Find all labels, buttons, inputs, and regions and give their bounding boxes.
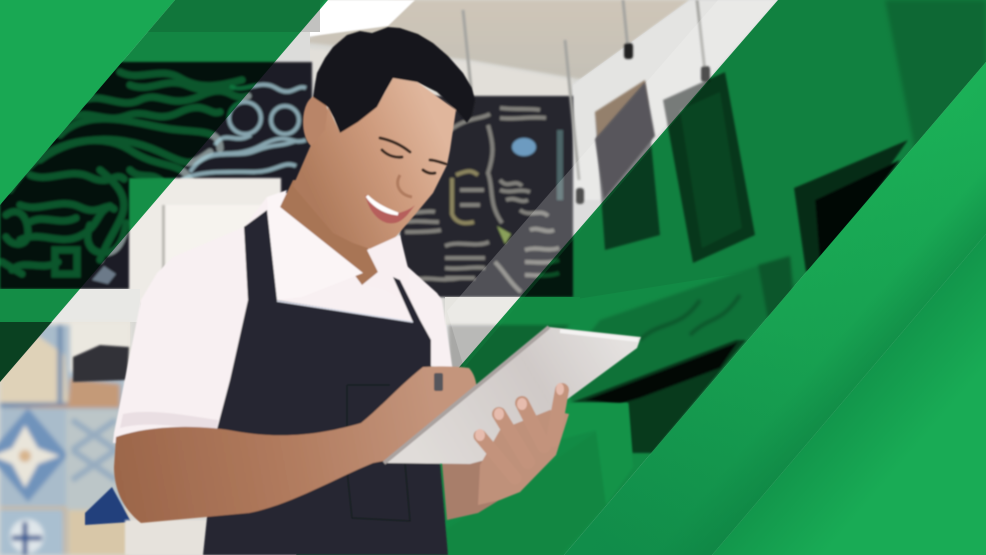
right side wall <box>560 0 986 555</box>
wall art band <box>560 256 795 402</box>
upper wall near ceiling <box>572 0 778 200</box>
collar <box>267 190 363 300</box>
tile wall <box>0 322 130 555</box>
apron bib <box>203 210 448 555</box>
rear forearm <box>442 440 530 520</box>
ear <box>303 96 329 148</box>
nose shadow <box>398 175 412 197</box>
blue box <box>85 487 131 525</box>
ring <box>434 373 443 391</box>
hanging frame one <box>595 80 660 250</box>
waiter figure <box>113 27 641 555</box>
apron collar highlight <box>277 301 413 322</box>
dark plant patch under left band <box>0 322 52 382</box>
shirt body and sleeve <box>113 190 453 443</box>
frame one seen through band <box>595 82 655 199</box>
ceiling beam <box>270 45 572 98</box>
solid green corner: bottom right <box>712 234 986 555</box>
stone counter <box>125 520 210 555</box>
top right darker wall <box>885 0 986 150</box>
grey patterned wall <box>448 325 570 400</box>
dark shelf <box>572 340 746 453</box>
neck <box>280 180 378 285</box>
holding hand <box>475 383 569 505</box>
tablet <box>384 327 641 464</box>
smile <box>365 195 415 223</box>
white sign panel <box>129 178 281 303</box>
face <box>293 78 456 250</box>
solid green band: right <box>564 62 986 555</box>
centre chalkboard <box>400 96 573 297</box>
hair <box>313 27 475 133</box>
right collar <box>366 235 412 305</box>
pendant lamps <box>463 0 710 204</box>
apron pocket <box>347 385 410 521</box>
translucent green band: top left <box>0 0 328 382</box>
lower furniture <box>445 403 633 555</box>
shade along lower band edge <box>564 62 986 555</box>
left arm <box>114 366 477 523</box>
ceiling <box>300 0 690 80</box>
left chalkboard <box>0 62 312 289</box>
skylight <box>298 0 415 38</box>
translucent green overlay: right <box>296 0 986 555</box>
white ledge below centre board <box>445 297 580 325</box>
lower right wall lighter <box>445 270 760 555</box>
hanging frame two <box>663 72 755 263</box>
translucent white diagonal band right <box>447 0 778 368</box>
dark box on shelf <box>73 345 129 382</box>
dark doorway <box>794 140 908 272</box>
left ledge <box>0 289 140 322</box>
upper-left wall strip <box>0 0 320 62</box>
wall under ledge <box>0 322 130 352</box>
sleeve shading <box>120 412 218 432</box>
solid green triangle: top left <box>0 0 175 205</box>
eyes and brows <box>380 138 446 173</box>
